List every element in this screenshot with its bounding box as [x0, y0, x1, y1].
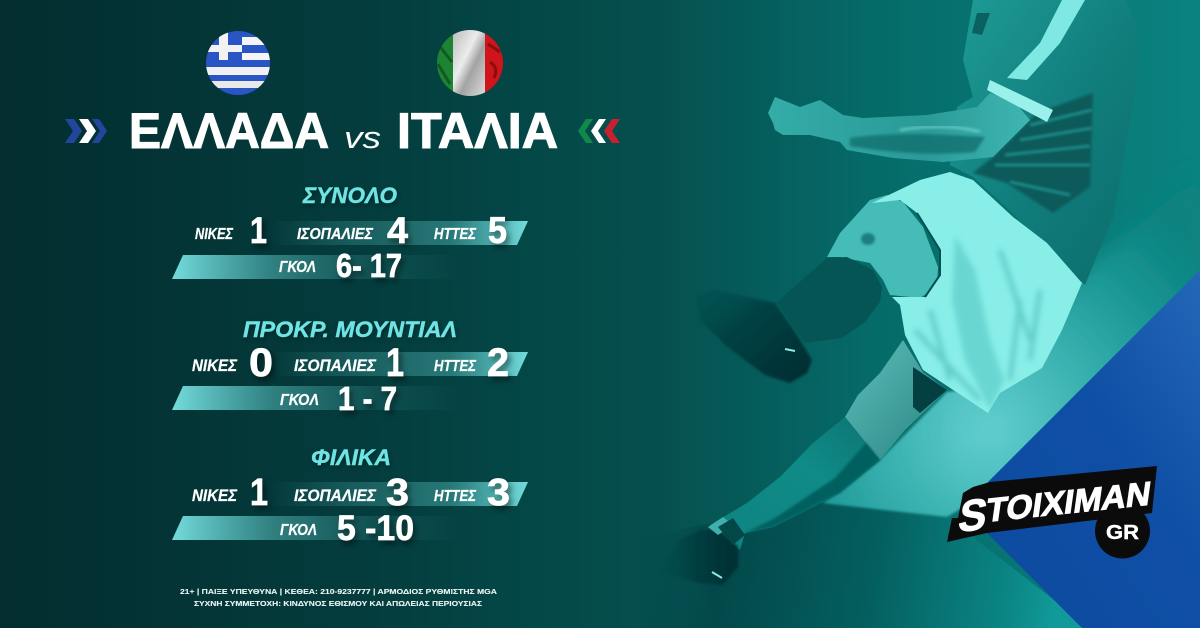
goals row	[280, 509, 414, 548]
arm	[768, 93, 1030, 162]
flag: Greece	[205, 30, 272, 96]
results row: ΝΙΚΕΣ	[192, 356, 238, 375]
results row: ΙΣΟΠΑΛΙΕΣ	[294, 486, 377, 505]
results row: ΗΤΤΕΣ	[434, 488, 477, 505]
results row: 2	[487, 341, 509, 385]
shirt sleeve stripe	[1007, 0, 1085, 80]
results row: ΙΣΟΠΑΛΙΕΣ	[297, 226, 374, 243]
results row: 1	[250, 472, 268, 514]
band: results	[270, 221, 528, 245]
shirt	[950, 0, 1139, 285]
logo banner	[947, 466, 1157, 542]
band: results	[270, 352, 528, 376]
results row: 3	[386, 472, 409, 514]
raised thigh	[827, 195, 938, 298]
standing thigh	[845, 340, 947, 460]
band: goals	[172, 255, 460, 279]
heading: total: ΣΥΝΟΛΟ	[302, 183, 397, 208]
logo wordmark initial: S	[956, 490, 990, 542]
results row	[192, 341, 509, 385]
logo GR badge	[1095, 504, 1150, 558]
left chevrons	[65, 119, 107, 143]
lower floor gradient	[640, 503, 1090, 628]
goals row: ΓΚΟΛ	[280, 522, 317, 539]
footer disclaimer: ΣΥΧΝΗ ΣΥΜΜΕΤΟΧΗ: ΚΙΝΔΥΝΟΣ ΕΘΙΣΜΟΥ ΚΑΙ ΑΠΩΛΕΙΑΣ ΠΕΡΙΟΥΣΙΑΣ	[194, 599, 482, 608]
goals row: 6- 17	[336, 247, 402, 284]
band: goals	[172, 386, 460, 410]
results row	[192, 472, 510, 514]
title: ΙΤΑΛΙΑ	[397, 103, 558, 159]
panel: friendlies	[172, 445, 528, 548]
results row: 3	[487, 472, 510, 514]
results row: ΝΙΚΕΣ	[195, 226, 234, 243]
logo wordmark: TOIXIMAN	[984, 476, 1153, 530]
raised boot	[696, 290, 812, 383]
results row: ΝΙΚΕΣ	[192, 486, 238, 505]
band: goals	[172, 516, 460, 540]
goals row: 5 -10	[337, 509, 414, 548]
footer disclaimer: 21+ | ΠΑΙΞΕ ΥΠΕΥΘΥΝΑ | ΚΕΘΕΑ: 210-9237777 | ΑΡΜΟΔΙΟΣ ΡΥΘΜΙΣΤΗΣ MGA	[180, 587, 498, 596]
goals row: ΓΚΟΛ	[279, 259, 316, 276]
results row: 1	[250, 210, 267, 251]
results row: ΗΤΤΕΣ	[434, 226, 477, 243]
band: results	[270, 482, 528, 506]
results row: 5	[488, 210, 507, 251]
sleeve cuff	[987, 80, 1053, 122]
heading: friendlies: ΦΙΛΙΚΑ	[311, 445, 391, 470]
results row: ΗΤΤΕΣ	[434, 358, 477, 375]
standing boot	[660, 517, 745, 585]
goals row	[280, 380, 397, 417]
heading: qualifiers: ΠΡΟΚΡ. ΜΟΥΝΤΙΑΛ	[243, 317, 457, 342]
blue corner triangle	[962, 270, 1200, 628]
standing sock	[710, 417, 880, 550]
raised leg sock	[777, 257, 882, 343]
results row	[195, 210, 507, 251]
footer disclaimer	[180, 587, 498, 608]
results row: ΙΣΟΠΑΛΙΕΣ	[294, 356, 377, 375]
player	[660, 0, 1139, 585]
logo	[947, 466, 1157, 558]
goals row: 1 - 7	[338, 380, 397, 417]
title: vs	[344, 120, 381, 155]
panel: total	[172, 183, 528, 284]
light smoke wedge	[823, 175, 1200, 517]
logo GR badge: GR	[1106, 522, 1140, 544]
results row: 4	[387, 210, 408, 251]
right chevrons	[578, 119, 620, 143]
title	[129, 103, 558, 159]
panel: world cup qualifiers	[172, 317, 528, 417]
title: ΕΛΛΑΔΑ	[129, 103, 329, 159]
flag: Italy	[437, 30, 503, 96]
shorts	[872, 172, 1082, 413]
results row: 0	[249, 341, 273, 385]
goals row: ΓΚΟΛ	[280, 392, 319, 409]
goals row	[279, 247, 402, 284]
results row: 1	[386, 341, 404, 385]
